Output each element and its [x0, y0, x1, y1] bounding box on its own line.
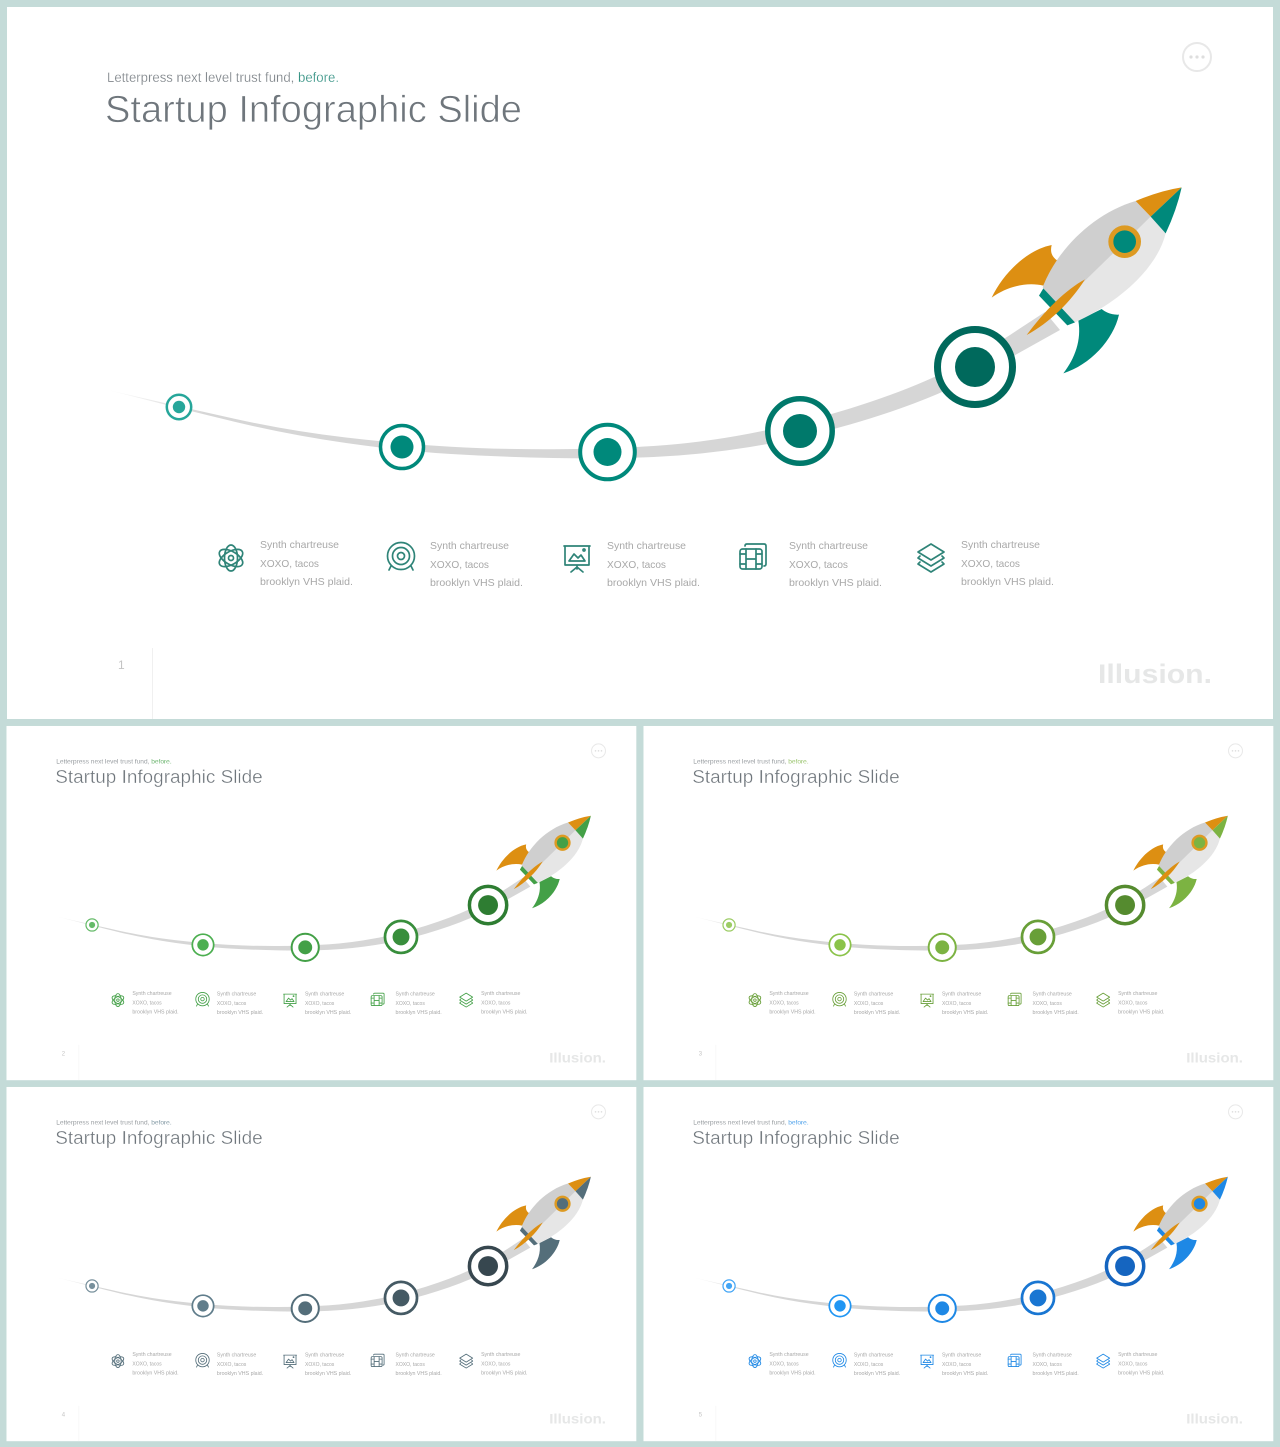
- captions: Synth chartreuse: [396, 1353, 435, 1359]
- captions: brooklyn VHS plaid.: [769, 1010, 816, 1016]
- icon: atom: [216, 545, 246, 571]
- captions: [769, 991, 1164, 1016]
- caption 3: [607, 540, 700, 589]
- captions: XOXO, tacos: [769, 1001, 799, 1007]
- brand logo: Illusion.: [1186, 1411, 1243, 1426]
- captions: XOXO, tacos: [396, 1001, 425, 1007]
- icon: target: [388, 542, 414, 570]
- captions: Synth chartreuse: [769, 991, 809, 997]
- captions: Synth chartreuse: [1118, 991, 1157, 997]
- caption 2: Synth chartreuse: [430, 540, 509, 552]
- captions: Synth chartreuse: [132, 991, 172, 997]
- menu icon: [1183, 43, 1211, 71]
- brand logo: Illusion.: [549, 1411, 606, 1426]
- captions: [769, 1352, 1164, 1377]
- caption 1: Synth chartreuse: [260, 539, 339, 551]
- curved track with milestones: [694, 878, 1167, 961]
- captions: XOXO, tacos: [305, 1001, 335, 1007]
- brand logo: Illusion.: [549, 1050, 606, 1065]
- panel: slide 5 blue: [643, 1087, 1273, 1441]
- caption 2: [430, 540, 523, 589]
- captions: Synth chartreuse: [1033, 992, 1072, 998]
- icon: presentation board: [564, 546, 590, 572]
- icon: layers: [918, 544, 944, 572]
- captions: Synth chartreuse: [1033, 1353, 1072, 1359]
- caption 1: XOXO, tacos: [260, 558, 319, 570]
- captions: XOXO, tacos: [1033, 1001, 1062, 1007]
- captions: brooklyn VHS plaid.: [942, 1371, 988, 1377]
- captions: Synth chartreuse: [1118, 1352, 1157, 1358]
- captions: XOXO, tacos: [481, 1362, 511, 1368]
- caption 4: Synth chartreuse: [789, 540, 868, 552]
- title: Startup Infographic Slide: [105, 89, 522, 131]
- subtitle: Letterpress next level trust fund, before.: [693, 758, 809, 765]
- icon: film frames: [740, 544, 766, 569]
- brand logo: Illusion.: [1098, 659, 1212, 689]
- panel: slide 4 slate: [6, 1087, 636, 1441]
- captions: Synth chartreuse: [132, 1352, 172, 1358]
- brand logo: Illusion.: [1186, 1050, 1243, 1065]
- title: Startup Infographic Slide: [692, 767, 900, 788]
- captions: brooklyn VHS plaid.: [132, 1010, 179, 1016]
- page number: 5: [699, 1412, 703, 1418]
- caption 3: brooklyn VHS plaid.: [607, 577, 700, 589]
- menu icon: [592, 744, 605, 758]
- title: Startup Infographic Slide: [692, 1128, 900, 1149]
- captions: XOXO, tacos: [942, 1001, 972, 1007]
- subtitle: Letterpress next level trust fund, before.: [693, 1119, 809, 1126]
- subtitle: Letterpress next level trust fund, before.: [107, 70, 339, 85]
- captions: XOXO, tacos: [1033, 1362, 1062, 1368]
- caption 4: brooklyn VHS plaid.: [789, 577, 882, 589]
- captions: XOXO, tacos: [769, 1362, 799, 1368]
- caption 5: brooklyn VHS plaid.: [961, 576, 1054, 588]
- subtitle: Letterpress next level trust fund, before.: [56, 1119, 172, 1126]
- rocket illustration: [1133, 1177, 1228, 1269]
- captions: brooklyn VHS plaid.: [1118, 1371, 1164, 1377]
- panel: slide 3 light green: [643, 726, 1273, 1080]
- captions: Synth chartreuse: [854, 992, 893, 998]
- captions: brooklyn VHS plaid.: [1033, 1010, 1079, 1016]
- page number: 4: [62, 1412, 66, 1418]
- menu icon: [592, 1105, 605, 1119]
- captions: brooklyn VHS plaid.: [854, 1371, 900, 1377]
- captions: XOXO, tacos: [396, 1362, 425, 1368]
- milestone 2: [380, 426, 424, 468]
- milestone 1: [167, 395, 191, 419]
- feature icons: [111, 1353, 473, 1368]
- title: Startup Infographic Slide: [55, 1128, 263, 1149]
- captions: Synth chartreuse: [769, 1352, 809, 1358]
- curved track with milestones: [57, 1239, 530, 1322]
- page number: 2: [62, 1051, 66, 1057]
- caption 1: brooklyn VHS plaid.: [260, 576, 353, 588]
- rocket illustration: [496, 1177, 591, 1269]
- caption 1: [260, 539, 353, 588]
- captions: brooklyn VHS plaid.: [1118, 1010, 1164, 1016]
- title: Startup Infographic Slide: [55, 767, 263, 788]
- rocket illustration: [992, 187, 1182, 373]
- curved track with milestones: [694, 1239, 1167, 1322]
- feature icons: [748, 992, 1110, 1007]
- menu icon: [1229, 1105, 1242, 1119]
- caption 4: XOXO, tacos: [789, 559, 848, 571]
- page number: 1: [118, 658, 125, 672]
- captions: Synth chartreuse: [481, 991, 520, 997]
- captions: brooklyn VHS plaid.: [854, 1010, 900, 1016]
- captions: XOXO, tacos: [305, 1362, 335, 1368]
- captions: brooklyn VHS plaid.: [305, 1010, 351, 1016]
- captions: brooklyn VHS plaid.: [942, 1010, 988, 1016]
- captions: brooklyn VHS plaid.: [132, 1371, 179, 1377]
- captions: XOXO, tacos: [132, 1362, 162, 1368]
- rocket illustration: [1133, 816, 1228, 908]
- captions: Synth chartreuse: [854, 1353, 893, 1359]
- caption 2: XOXO, tacos: [430, 559, 489, 571]
- captions: [132, 1352, 527, 1377]
- captions: Synth chartreuse: [305, 992, 344, 998]
- captions: brooklyn VHS plaid.: [396, 1371, 442, 1377]
- captions: [132, 991, 527, 1016]
- captions: Synth chartreuse: [217, 992, 256, 998]
- caption 3: XOXO, tacos: [607, 559, 666, 571]
- panel: slide 1 teal: [7, 7, 1273, 719]
- caption 2: brooklyn VHS plaid.: [430, 577, 523, 589]
- captions: XOXO, tacos: [217, 1001, 247, 1007]
- captions: brooklyn VHS plaid.: [396, 1010, 442, 1016]
- caption 3: Synth chartreuse: [607, 540, 686, 552]
- captions: XOXO, tacos: [1118, 1001, 1148, 1007]
- captions: XOXO, tacos: [1118, 1362, 1148, 1368]
- rocket illustration: [496, 816, 591, 908]
- captions: Synth chartreuse: [217, 1353, 256, 1359]
- milestone 4: [768, 399, 832, 463]
- captions: XOXO, tacos: [217, 1362, 247, 1368]
- captions: brooklyn VHS plaid.: [305, 1371, 351, 1377]
- milestone 3: [580, 425, 635, 479]
- captions: brooklyn VHS plaid.: [217, 1010, 263, 1016]
- captions: Synth chartreuse: [396, 992, 435, 998]
- caption 5: XOXO, tacos: [961, 558, 1020, 570]
- caption 5: [961, 539, 1054, 588]
- captions: Synth chartreuse: [942, 1353, 981, 1359]
- milestone 5: [938, 330, 1012, 404]
- caption 4: [789, 540, 882, 589]
- captions: XOXO, tacos: [481, 1001, 511, 1007]
- feature icons: [111, 992, 473, 1007]
- menu icon: [1229, 744, 1242, 758]
- captions: Synth chartreuse: [942, 992, 981, 998]
- curved track with milestones: [57, 878, 530, 961]
- page number: 3: [699, 1051, 703, 1057]
- captions: Synth chartreuse: [481, 1352, 520, 1358]
- captions: brooklyn VHS plaid.: [769, 1371, 816, 1377]
- captions: brooklyn VHS plaid.: [481, 1371, 527, 1377]
- captions: XOXO, tacos: [942, 1362, 972, 1368]
- captions: XOXO, tacos: [132, 1001, 162, 1007]
- captions: XOXO, tacos: [854, 1001, 884, 1007]
- captions: brooklyn VHS plaid.: [217, 1371, 263, 1377]
- captions: XOXO, tacos: [854, 1362, 884, 1368]
- captions: Synth chartreuse: [305, 1353, 344, 1359]
- feature icons: [748, 1353, 1110, 1368]
- curved growth track: [108, 312, 1060, 458]
- captions: brooklyn VHS plaid.: [1033, 1371, 1079, 1377]
- subtitle: Letterpress next level trust fund, before.: [56, 758, 172, 765]
- captions: brooklyn VHS plaid.: [481, 1010, 527, 1016]
- panel: slide 2 green: [6, 726, 636, 1080]
- caption 5: Synth chartreuse: [961, 539, 1040, 551]
